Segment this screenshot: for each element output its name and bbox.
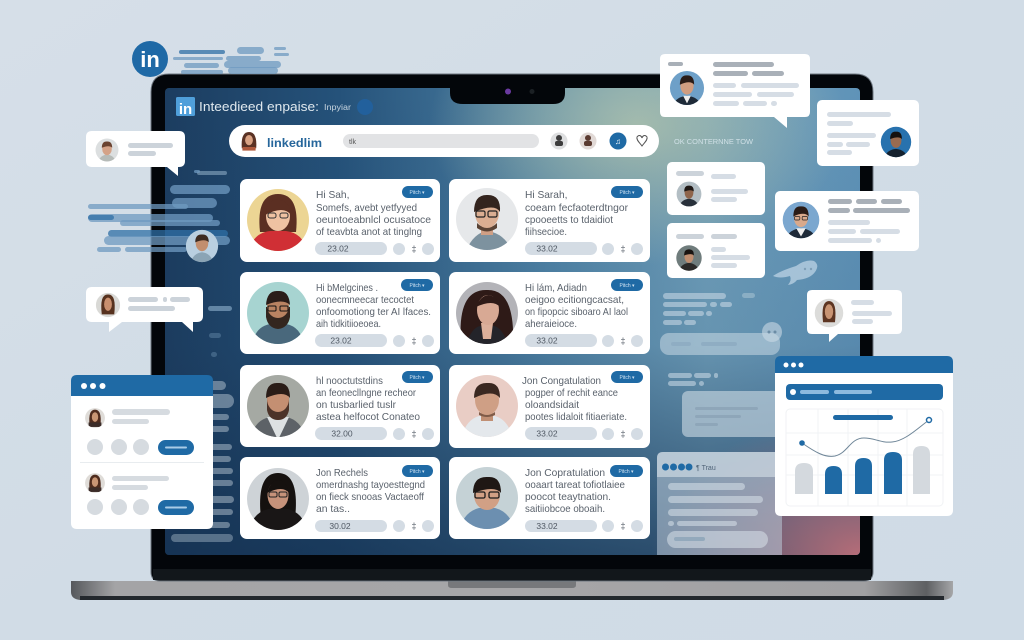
sidebar ghost items bbox=[171, 171, 234, 542]
panel: left browser window bbox=[71, 375, 213, 529]
action badge: Pitch ▾ bbox=[409, 375, 425, 381]
metric row: ‡ bbox=[620, 244, 626, 254]
comment bubble: mid left bbox=[86, 287, 203, 332]
message lines bbox=[827, 112, 891, 155]
message text: of teavbta anot at tinglng bbox=[316, 227, 422, 238]
metric row: ‡ bbox=[411, 429, 417, 439]
message text: pogper of rechit eance bbox=[525, 388, 618, 399]
message text: Hi lám, Adiadn bbox=[525, 283, 587, 294]
chart title bbox=[833, 415, 893, 420]
window dots bbox=[81, 383, 106, 389]
metric row: ‡ bbox=[620, 429, 626, 439]
action badge bbox=[402, 465, 433, 477]
message text: omerdnashg tayoesttegnd bbox=[316, 480, 425, 491]
message text: aih tidkitiioeoea. bbox=[316, 319, 381, 330]
message text: Hi Sarah, bbox=[525, 190, 567, 201]
app title: Inteedieed enpaise: bbox=[199, 100, 319, 114]
toolbar icons bbox=[550, 132, 647, 150]
search input bbox=[343, 134, 539, 148]
message text: Jon Copratulation bbox=[525, 468, 605, 479]
message text: on fipopcic siboaro AI laol bbox=[525, 307, 628, 318]
app header bbox=[176, 97, 373, 118]
laptop bbox=[71, 74, 953, 600]
metric row: 32.00 bbox=[331, 428, 353, 438]
trend line bbox=[802, 420, 929, 456]
avatar bbox=[670, 71, 704, 107]
window dots bbox=[784, 362, 804, 368]
metric row: ‡ bbox=[620, 521, 626, 531]
message lines bbox=[676, 234, 750, 268]
action badge: Pitch ▾ bbox=[618, 469, 634, 475]
search bar brand: linkedlim bbox=[267, 138, 322, 150]
comment bubble: right lower bbox=[807, 290, 902, 342]
translucent form panel bbox=[657, 452, 782, 555]
message text bbox=[525, 468, 625, 515]
action badge: Pitch ▾ bbox=[619, 190, 635, 196]
message lines bbox=[676, 171, 748, 202]
message card: right upper bbox=[817, 100, 919, 166]
laptop base bbox=[71, 581, 953, 600]
message text: hl nooctutstdins bbox=[316, 376, 383, 387]
avatar: woman with dark curls bbox=[456, 282, 518, 347]
message text: on fieck snooas Vactaeoff bbox=[316, 492, 424, 503]
contact row 1 bbox=[85, 408, 194, 455]
metric row: 23.02 bbox=[330, 336, 352, 346]
search bar bbox=[229, 125, 659, 157]
message card: screen right 2 bbox=[667, 223, 765, 278]
metric row: 33.02 bbox=[536, 336, 558, 346]
app subtitle: Inpyiar bbox=[324, 103, 351, 112]
message lines bbox=[128, 143, 173, 156]
metric row: 23.02 bbox=[327, 244, 349, 254]
metric row bbox=[315, 334, 434, 347]
data streaks top bbox=[173, 47, 289, 74]
avatar bbox=[96, 139, 118, 163]
message text: an tas.. bbox=[316, 504, 350, 515]
action badge bbox=[611, 371, 643, 383]
camera notch bbox=[450, 88, 565, 104]
form fields bbox=[667, 483, 768, 548]
metric row: ‡ bbox=[411, 244, 417, 254]
message text: poocot teaytnation. bbox=[525, 492, 611, 503]
icon: linkedin circle badge bbox=[132, 41, 168, 77]
metric row bbox=[315, 242, 434, 255]
action badge: Pitch ▾ bbox=[409, 190, 425, 196]
panel: card 3 bbox=[240, 272, 440, 354]
translucent chat bubble: middle bbox=[682, 391, 782, 437]
message text: Jon Rechels bbox=[316, 468, 368, 479]
panel: card 4 bbox=[449, 272, 650, 354]
avatar: bearded man bbox=[247, 282, 309, 347]
metric row bbox=[525, 242, 643, 255]
action badge bbox=[402, 186, 433, 198]
avatar: floating man bbox=[186, 230, 218, 264]
avatar bbox=[677, 182, 701, 208]
panel: card 8 bbox=[449, 457, 650, 539]
avatar: woman with long black hair bbox=[247, 468, 309, 533]
metric row bbox=[525, 427, 643, 440]
trend points bbox=[799, 418, 932, 446]
message text bbox=[316, 283, 431, 330]
message text: Hi bMelgcines . bbox=[316, 283, 378, 294]
metric row bbox=[315, 520, 434, 532]
avatar: woman in red bbox=[247, 189, 309, 254]
action badge: Pitch ▾ bbox=[409, 283, 425, 289]
bars bbox=[795, 446, 930, 494]
message text: an feonecllngne recheor bbox=[316, 388, 417, 399]
metric row: 30.02 bbox=[329, 521, 351, 531]
avatar bbox=[96, 293, 120, 317]
ghost text lines bbox=[663, 293, 755, 386]
laptop bezel bbox=[151, 74, 873, 581]
comment bubble: top right bbox=[660, 54, 810, 128]
progress dots bbox=[662, 464, 692, 470]
avatar bbox=[676, 245, 702, 272]
message text: aheraieioce. bbox=[525, 319, 577, 330]
status dot bbox=[357, 99, 373, 115]
icon: linkedin circle badge: in bbox=[140, 47, 160, 72]
message text bbox=[522, 376, 627, 423]
avatar bbox=[815, 299, 843, 327]
action badge bbox=[611, 186, 643, 198]
metric row: ‡ bbox=[411, 521, 417, 531]
message text: on tusbarlied tuslr bbox=[316, 400, 397, 411]
action badge bbox=[611, 279, 643, 291]
message card: screen right 1 bbox=[667, 162, 765, 215]
chart toolbar bbox=[786, 384, 943, 400]
message lines bbox=[851, 300, 892, 324]
contact row 2 bbox=[85, 473, 194, 515]
message text: pootes lidaloit fitiaeriate. bbox=[525, 412, 627, 423]
comment bubble: top left bbox=[86, 131, 185, 176]
screen bbox=[165, 88, 860, 555]
screen header caption: OK CONTERNNE TOW bbox=[674, 137, 754, 146]
metric row: 33.02 bbox=[536, 428, 558, 438]
message lines bbox=[128, 297, 190, 311]
avatar bbox=[783, 202, 819, 240]
message text: saitiiobcoe oboaih. bbox=[525, 504, 605, 515]
avatar bbox=[881, 127, 911, 159]
metric row: 33.02 bbox=[536, 244, 558, 254]
message lines bbox=[668, 62, 799, 106]
panel: card 1 bbox=[240, 179, 440, 262]
avatar: man with glasses bbox=[456, 188, 518, 253]
search input: tlk bbox=[349, 139, 356, 146]
message text: Somefs, avebt yetfyyed bbox=[316, 203, 417, 214]
message text: onfoomotiong ter AI lfaces. bbox=[316, 307, 431, 318]
panel: card 6 bbox=[449, 365, 650, 448]
message text: cpooeetts to tdaidiot bbox=[525, 215, 613, 226]
message text bbox=[316, 190, 431, 238]
message text: oonecmneecar tecoctet bbox=[316, 295, 414, 306]
panel: card 2 bbox=[449, 179, 650, 262]
metric row: ‡ bbox=[411, 336, 417, 346]
translucent chat bubble: top bbox=[660, 322, 782, 355]
message lines bbox=[828, 199, 910, 243]
metric row bbox=[315, 427, 434, 440]
metric row bbox=[525, 334, 643, 347]
action badge bbox=[402, 371, 433, 383]
message text: oeigoo ecitiongcacsat, bbox=[525, 295, 624, 306]
form heading: ¶ Trau bbox=[696, 465, 716, 472]
message text: ooaart tareat tofiotlaiee bbox=[525, 480, 625, 491]
row divider bbox=[80, 462, 204, 463]
icon: linkedin square: in bbox=[179, 101, 192, 118]
panel: card 7 bbox=[240, 457, 440, 539]
toolbar icons: ♫ bbox=[615, 137, 621, 146]
message text: fiihsecioe. bbox=[525, 227, 567, 238]
action badge: Pitch ▾ bbox=[619, 375, 635, 381]
action badge: Pitch ▾ bbox=[619, 283, 635, 289]
metric row: 33.02 bbox=[536, 521, 558, 531]
message text bbox=[525, 190, 629, 238]
message text: coeam fecfaoterdtngor bbox=[525, 203, 629, 214]
action badge bbox=[610, 465, 643, 477]
data streaks left bbox=[88, 170, 230, 252]
line and bar chart bbox=[786, 409, 943, 506]
message text: oeuntoeabnlcl ocusatoce bbox=[316, 215, 431, 226]
avatar: man on pink background bbox=[456, 375, 518, 440]
metric row bbox=[525, 520, 643, 532]
message card: right middle bbox=[775, 191, 919, 251]
message text bbox=[525, 283, 628, 330]
avatar: man in denim shirt bbox=[456, 467, 518, 532]
panel: chart window bbox=[775, 356, 953, 516]
icon: ghost chat bird bbox=[773, 261, 817, 285]
message text: oloandsidait bbox=[525, 400, 579, 411]
message text bbox=[316, 376, 420, 423]
message text: Hi Sah, bbox=[316, 190, 349, 201]
message text bbox=[316, 468, 425, 515]
avatar: man in grey blazer bbox=[247, 375, 309, 440]
message text: astea helfocot Conateo bbox=[316, 412, 420, 423]
action badge: Pitch ▾ bbox=[409, 469, 425, 475]
panel: card 5 bbox=[240, 365, 440, 447]
metric row: ‡ bbox=[620, 336, 626, 346]
icon: linkedin square bbox=[176, 97, 195, 118]
search bar avatar bbox=[242, 132, 256, 151]
message text: Jon Congatulation bbox=[522, 376, 601, 387]
action badge bbox=[401, 279, 433, 291]
